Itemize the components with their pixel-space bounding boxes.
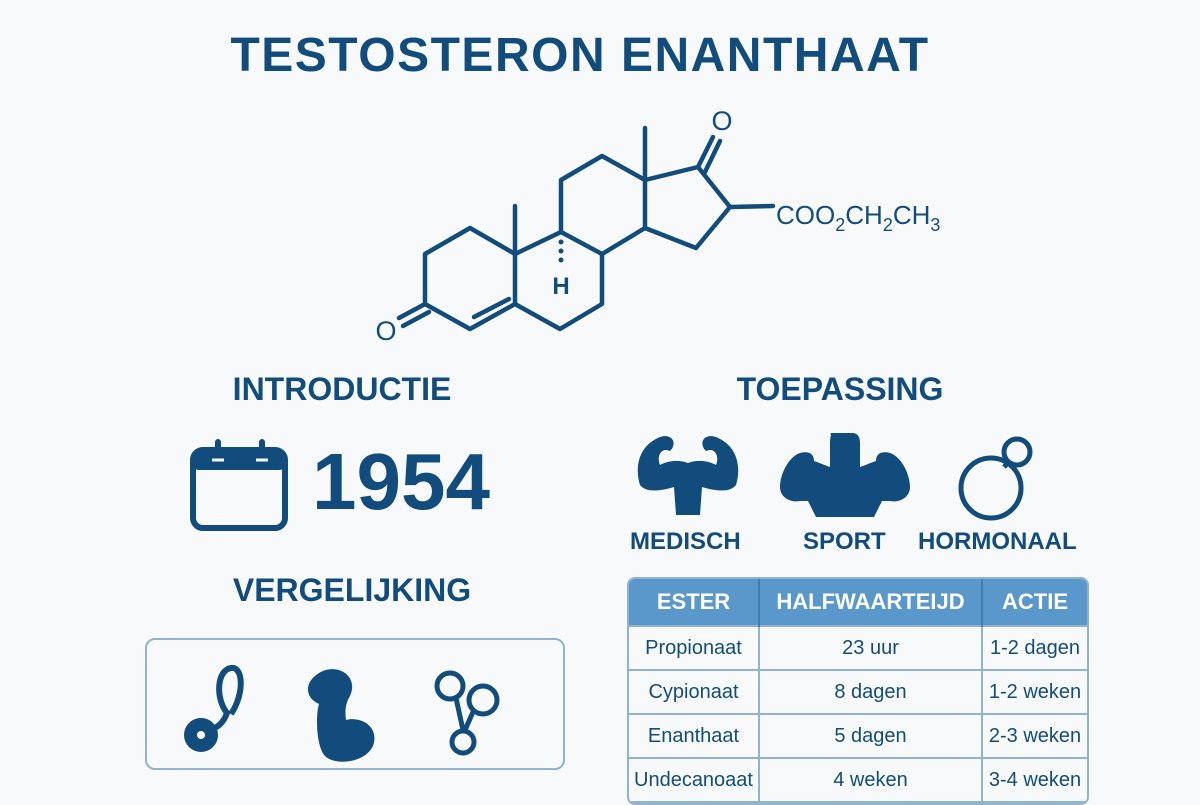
table: ester comparison: 3-4 weken <box>989 768 1081 790</box>
molecule structure: CH <box>893 200 930 230</box>
table: ester comparison: 1-2 weken <box>989 680 1081 702</box>
molecule structure: CH <box>845 200 883 230</box>
table: ester comparison: 23 uur <box>842 636 899 658</box>
text: SPORT <box>803 528 886 555</box>
text: HORMONAAL <box>918 528 1077 555</box>
molecule structure: H <box>552 273 570 300</box>
table: ester comparison: Undecanoaat <box>634 768 753 790</box>
heading: introductie: INTRODUCTIE <box>233 371 451 407</box>
labels: applications: MEDISCH <box>630 528 741 555</box>
table: ester comparison: 5 dagen <box>834 724 907 746</box>
table: ester comparison: 4 weken <box>833 768 908 790</box>
table: ester comparison: 8 dagen <box>834 680 907 702</box>
panel: comparison icons <box>145 638 565 770</box>
molecule structure: 2 <box>835 215 845 235</box>
year 1954: 1954 <box>312 437 490 526</box>
molecule structure: COO <box>776 200 835 230</box>
molecule structure: O <box>375 316 397 346</box>
icon: male symbol <box>961 458 1021 518</box>
table: ester comparison: ESTER <box>657 589 730 614</box>
title: TESTOSTERON ENANTHAAT <box>230 29 930 82</box>
icon: sport torso <box>780 433 910 517</box>
table: ester comparison: 1-2 dagen <box>990 636 1080 658</box>
table: ester comparison: Cypionaat <box>648 680 739 702</box>
table: ester comparison: Propionaat <box>645 636 742 658</box>
icon: medisch arms <box>638 436 738 515</box>
table: ester comparison: 2-3 weken <box>989 724 1081 746</box>
molecule structure <box>375 106 940 346</box>
table: ester comparison <box>627 577 1089 805</box>
heading: toepassing: TOEPASSING <box>737 371 943 407</box>
icon: stethoscope <box>187 668 241 749</box>
icons: applications <box>638 433 1032 520</box>
icon: calendar <box>190 439 288 531</box>
molecule structure: 2 <box>883 215 893 235</box>
table: ester comparison: ACTIE <box>1002 589 1068 614</box>
icon: muscle blob <box>308 669 374 762</box>
molecule structure: 3 <box>930 215 940 235</box>
icon: molecule rings <box>437 673 497 753</box>
molecule structure: O <box>711 106 733 136</box>
table: ester comparison: Enanthaat <box>648 724 739 746</box>
table: ester comparison: HALFWAARTEIJD <box>776 589 965 614</box>
heading: vergelijking: VERGELIJKING <box>233 572 471 608</box>
